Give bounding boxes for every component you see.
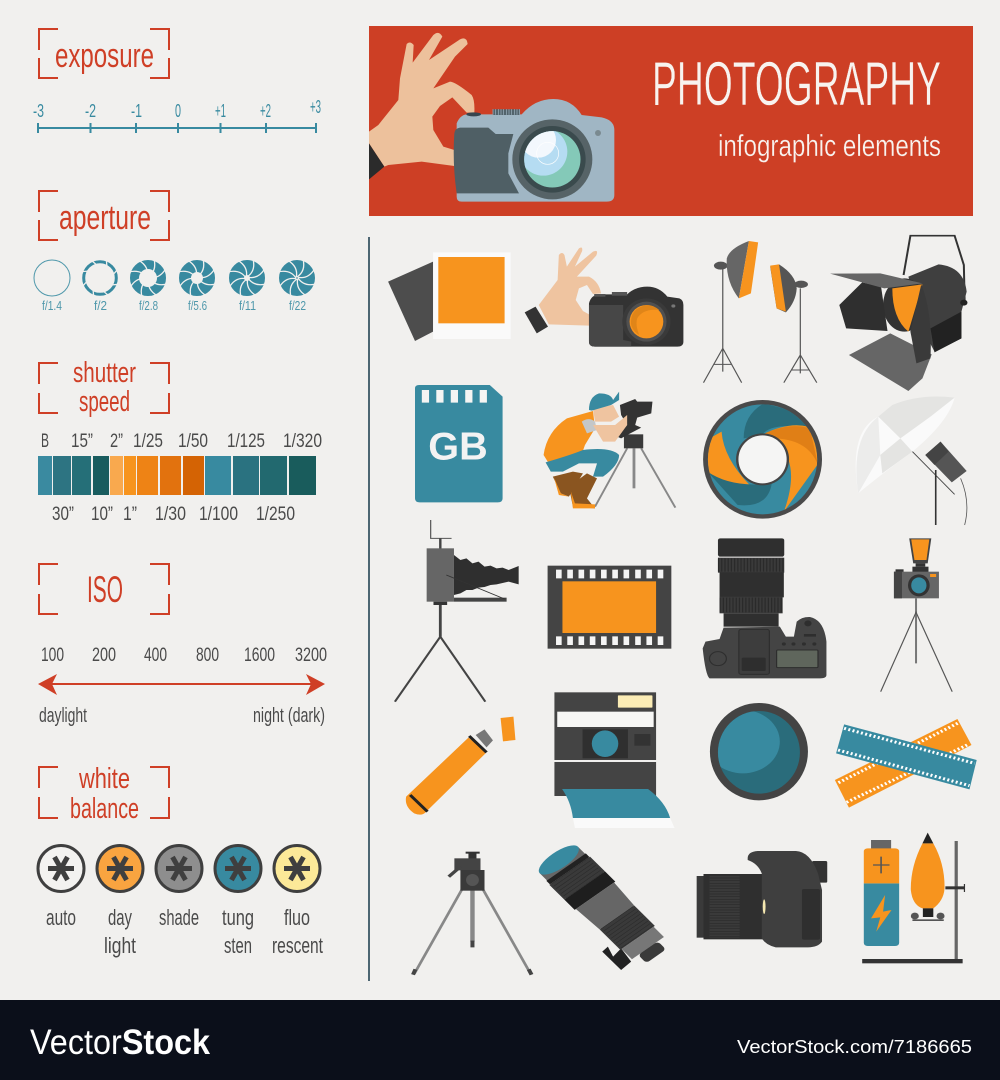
- panel: white balance: [38, 763, 323, 958]
- aperture f-stop irises: f/22: [289, 298, 306, 313]
- icon grid: [388, 236, 977, 975]
- exposure scale: +1: [215, 101, 226, 121]
- aperture f-stop irises: f/1.4: [42, 298, 62, 313]
- panel: exposure: [33, 29, 321, 133]
- white balance labels: auto: [46, 905, 76, 930]
- exposure heading: exposure: [55, 37, 154, 75]
- exposure scale: [33, 97, 321, 133]
- aperture f-stop irises: f/5.6: [188, 298, 207, 313]
- aperture heading: aperture: [59, 199, 151, 237]
- ISO values: 100: [41, 645, 64, 666]
- shutter speed labels: 30”: [52, 504, 74, 525]
- icon: flash bulb on stand: [862, 833, 965, 963]
- banner: [369, 26, 973, 216]
- aperture heading: [39, 191, 169, 240]
- ISO heading: [39, 564, 169, 614]
- icon: DSLR side view: [697, 851, 827, 947]
- shutter speed heading: shutter: [73, 357, 136, 389]
- icon: memory card: [415, 385, 503, 502]
- icon: instant camera: [554, 692, 675, 828]
- shutter speed labels: 1”: [123, 504, 137, 525]
- shutter speed labels: 1/50: [178, 431, 208, 452]
- exposure heading: [39, 29, 169, 78]
- ISO values: 800: [196, 645, 219, 666]
- white balance heading: [39, 763, 169, 825]
- shutter speed bar: [38, 456, 316, 495]
- subtitle: infographic elements: [718, 128, 941, 163]
- icon: film frame: [548, 566, 671, 649]
- icon: aperture ring: [699, 398, 824, 522]
- white balance heading: white: [78, 763, 130, 795]
- ISO values: 1600: [244, 645, 275, 666]
- arrow: daylight to night: [38, 674, 325, 695]
- footer logo: VectorStock: [30, 1023, 210, 1062]
- shutter speed labels: 2”: [110, 431, 123, 452]
- shutter speed labels: 15”: [71, 431, 93, 452]
- aperture f-stop irises: [34, 259, 316, 313]
- aperture f-stop irises: f/11: [239, 298, 256, 313]
- shutter speed labels: [41, 431, 322, 525]
- footer url: VectorStock.com/7186665: [737, 1037, 972, 1057]
- icon: crossed film strips: [835, 719, 977, 808]
- panel: aperture: [34, 191, 316, 313]
- shutter speed labels: 1/100: [199, 504, 238, 525]
- white balance labels: rescent: [272, 933, 323, 958]
- ISO scale labels: daylight: [39, 705, 87, 727]
- ISO heading: ISO: [87, 569, 123, 610]
- white balance heading: balance: [70, 793, 139, 825]
- shutter speed labels: 10”: [91, 504, 113, 525]
- shutter speed heading: speed: [79, 386, 130, 418]
- ISO values: 200: [92, 645, 116, 666]
- ISO scale labels: [39, 705, 325, 727]
- icon: studio umbrella: [856, 396, 967, 525]
- shutter speed labels: 1/125: [227, 431, 265, 452]
- icon: photo prints: [388, 252, 511, 341]
- white balance labels: light: [104, 933, 136, 958]
- footer watermark bar: [0, 1000, 1000, 1080]
- icon: USB stick: [406, 717, 515, 815]
- shutter speed labels: 1/30: [155, 504, 186, 525]
- aperture f-stop irises: f/2: [94, 298, 107, 313]
- white balance labels: [46, 905, 323, 958]
- icon: camera with flash on tripod: [881, 538, 952, 692]
- white balance labels: shade: [159, 905, 199, 930]
- exposure scale: -2: [85, 101, 96, 121]
- exposure scale: 0: [175, 101, 181, 121]
- white balance labels: tung: [222, 905, 254, 930]
- ISO values: 400: [144, 645, 167, 666]
- icon: small tripod: [413, 852, 532, 975]
- icon: crouching photographer: [544, 392, 675, 508]
- exposure scale: -1: [131, 101, 142, 121]
- shutter speed labels: B: [41, 431, 49, 452]
- icon: studio softbox lights: [703, 241, 817, 383]
- icon: hand on camera: [369, 33, 614, 202]
- icon: fresnel spotlight: [830, 236, 967, 391]
- white balance labels: sten: [224, 933, 252, 958]
- white balance labels: fluo: [284, 905, 310, 930]
- aperture f-stop irises: f/2.8: [139, 298, 158, 313]
- panel: ISO: [38, 564, 327, 727]
- shutter speed heading: [39, 357, 169, 418]
- icon: bellows camera on tripod: [395, 520, 519, 702]
- ISO values: [41, 645, 327, 666]
- icon: memory card: GB: [428, 425, 488, 468]
- white balance labels: day: [108, 905, 132, 930]
- white balance icons: [38, 846, 320, 892]
- panel: shutter speed: [38, 357, 322, 525]
- shutter speed labels: 1/320: [283, 431, 322, 452]
- icon: lens filter: [706, 703, 808, 800]
- shutter speed labels: 1/250: [256, 504, 295, 525]
- icon: battery: [864, 840, 899, 946]
- ISO values: 3200: [295, 645, 327, 666]
- ISO scale labels: night (dark): [253, 705, 325, 727]
- icon: hand pressing dark camera: [525, 247, 683, 347]
- icon: DSLR top view with zoom lens: [703, 538, 826, 678]
- shutter speed labels: 1/25: [133, 431, 163, 452]
- exposure scale: -3: [33, 101, 44, 121]
- icon: telephoto lens: [532, 840, 677, 970]
- exposure scale: +2: [260, 101, 271, 121]
- exposure scale: +3: [310, 97, 321, 117]
